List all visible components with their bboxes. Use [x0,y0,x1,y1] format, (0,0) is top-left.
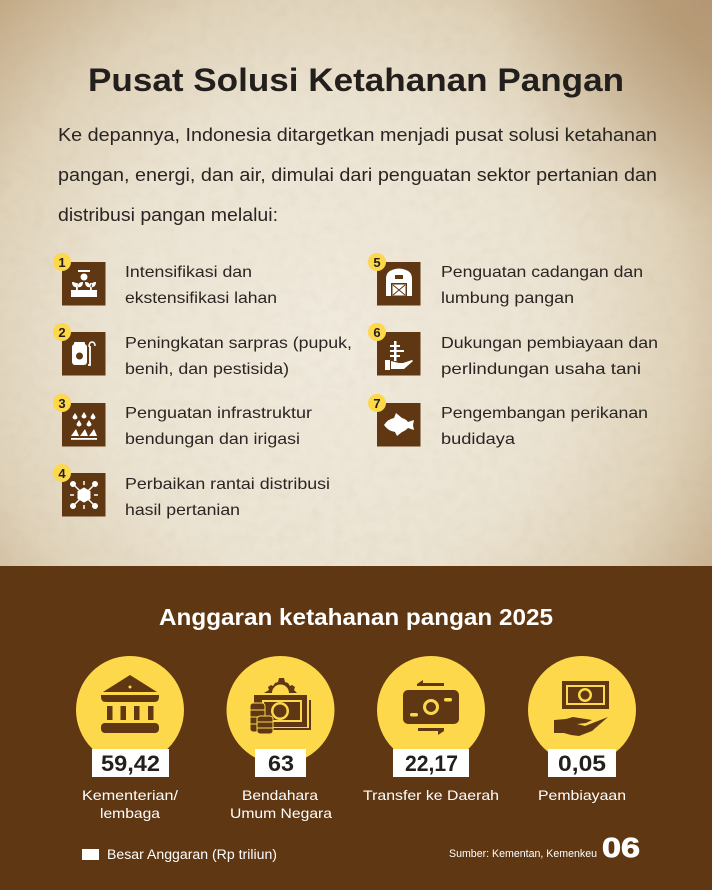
budget: bendahara: Umum Negara [230,805,332,821]
budget: transfer: Transfer ke Daerah [363,787,499,803]
icon: money with coins and gear [250,678,311,734]
budget: transfer [363,656,499,803]
item 5: Penguatan cadangan dan [441,264,643,281]
item 5: lumbung pangan [441,290,574,307]
icon: institution building [101,675,159,733]
intro paragraph: Ke depannya, Indonesia ditargetkan menjadi pusat solusi ketahanan [58,125,657,145]
item 4: hasil pertanian [125,502,240,519]
item 3: Penguatan infrastruktur [125,405,313,422]
budget: bendahara: Bendahara [242,787,318,803]
budget: bendahara [226,656,334,821]
budget heading: Anggaran ketahanan pangan 2025 [159,604,553,630]
intro paragraph: distribusi pangan melalui: [58,205,278,225]
icon: barn [386,268,412,296]
budget: pembiayaan [528,656,636,803]
item 5: 5 [373,255,381,270]
icon: pesticide sprayer [72,342,95,365]
intro paragraph: pangan, energi, dan air, dimulai dari penguatan sektor pertanian dan [58,165,657,185]
title: Pusat Solusi Ketahanan Pangan [88,62,624,98]
item 7: budidaya [441,431,515,448]
panel: budget [0,566,712,890]
item 2 [53,323,352,378]
item 1: Intensifikasi dan [125,264,252,281]
item 6: Dukungan pembiayaan dan [441,335,658,352]
budget: pembiayaan: Pembiayaan [538,787,626,803]
item 4: 4 [58,466,66,481]
item 4 [53,464,330,519]
item 1 [53,253,277,307]
source note: Sumber: Kementan, Kemenkeu [449,848,597,860]
item 6: perlindungan usaha tani [441,361,641,378]
page number: 06 [602,832,640,863]
budget: kementerian: Kementerian/ [82,787,178,803]
icon: water drops over field [71,412,97,440]
budget: pembiayaan: 0,05 [558,751,606,776]
icon: hand holding plant [385,341,413,370]
item 3 [53,394,313,448]
item 7: Pengembangan perikanan [441,405,648,422]
item 2: Peningkatan sarpras (pupuk, [125,335,352,352]
icon: fish [384,413,414,436]
budget: kementerian [76,656,184,821]
item 2: benih, dan pestisida) [125,361,289,378]
budget: transfer: 22,17 [405,751,458,776]
item 7: 7 [373,396,381,411]
budget: kementerian: lembaga [100,805,160,821]
item 4: Perbaikan rantai distribusi [125,476,330,493]
paper background [0,0,712,566]
legend: Besar Anggaran (Rp triliun) [107,847,277,862]
budget: bendahara: 63 [268,751,294,776]
icon: money transfer [403,680,459,735]
icon: distribution network [70,481,98,509]
budget: kementerian: 59,42 [101,751,160,776]
item 3: 3 [58,396,66,411]
item 2: 2 [58,325,66,340]
item 1: ekstensifikasi lahan [125,290,277,307]
icon: hand with money [554,681,609,736]
item 6: 6 [373,325,381,340]
item 5 [368,253,643,307]
item 6 [368,323,658,378]
item 3: bendungan dan irigasi [125,431,300,448]
item 7 [368,394,648,448]
item 1: 1 [58,255,66,270]
icon: seedlings with sprinkler [71,270,97,297]
intro paragraph [58,125,657,225]
